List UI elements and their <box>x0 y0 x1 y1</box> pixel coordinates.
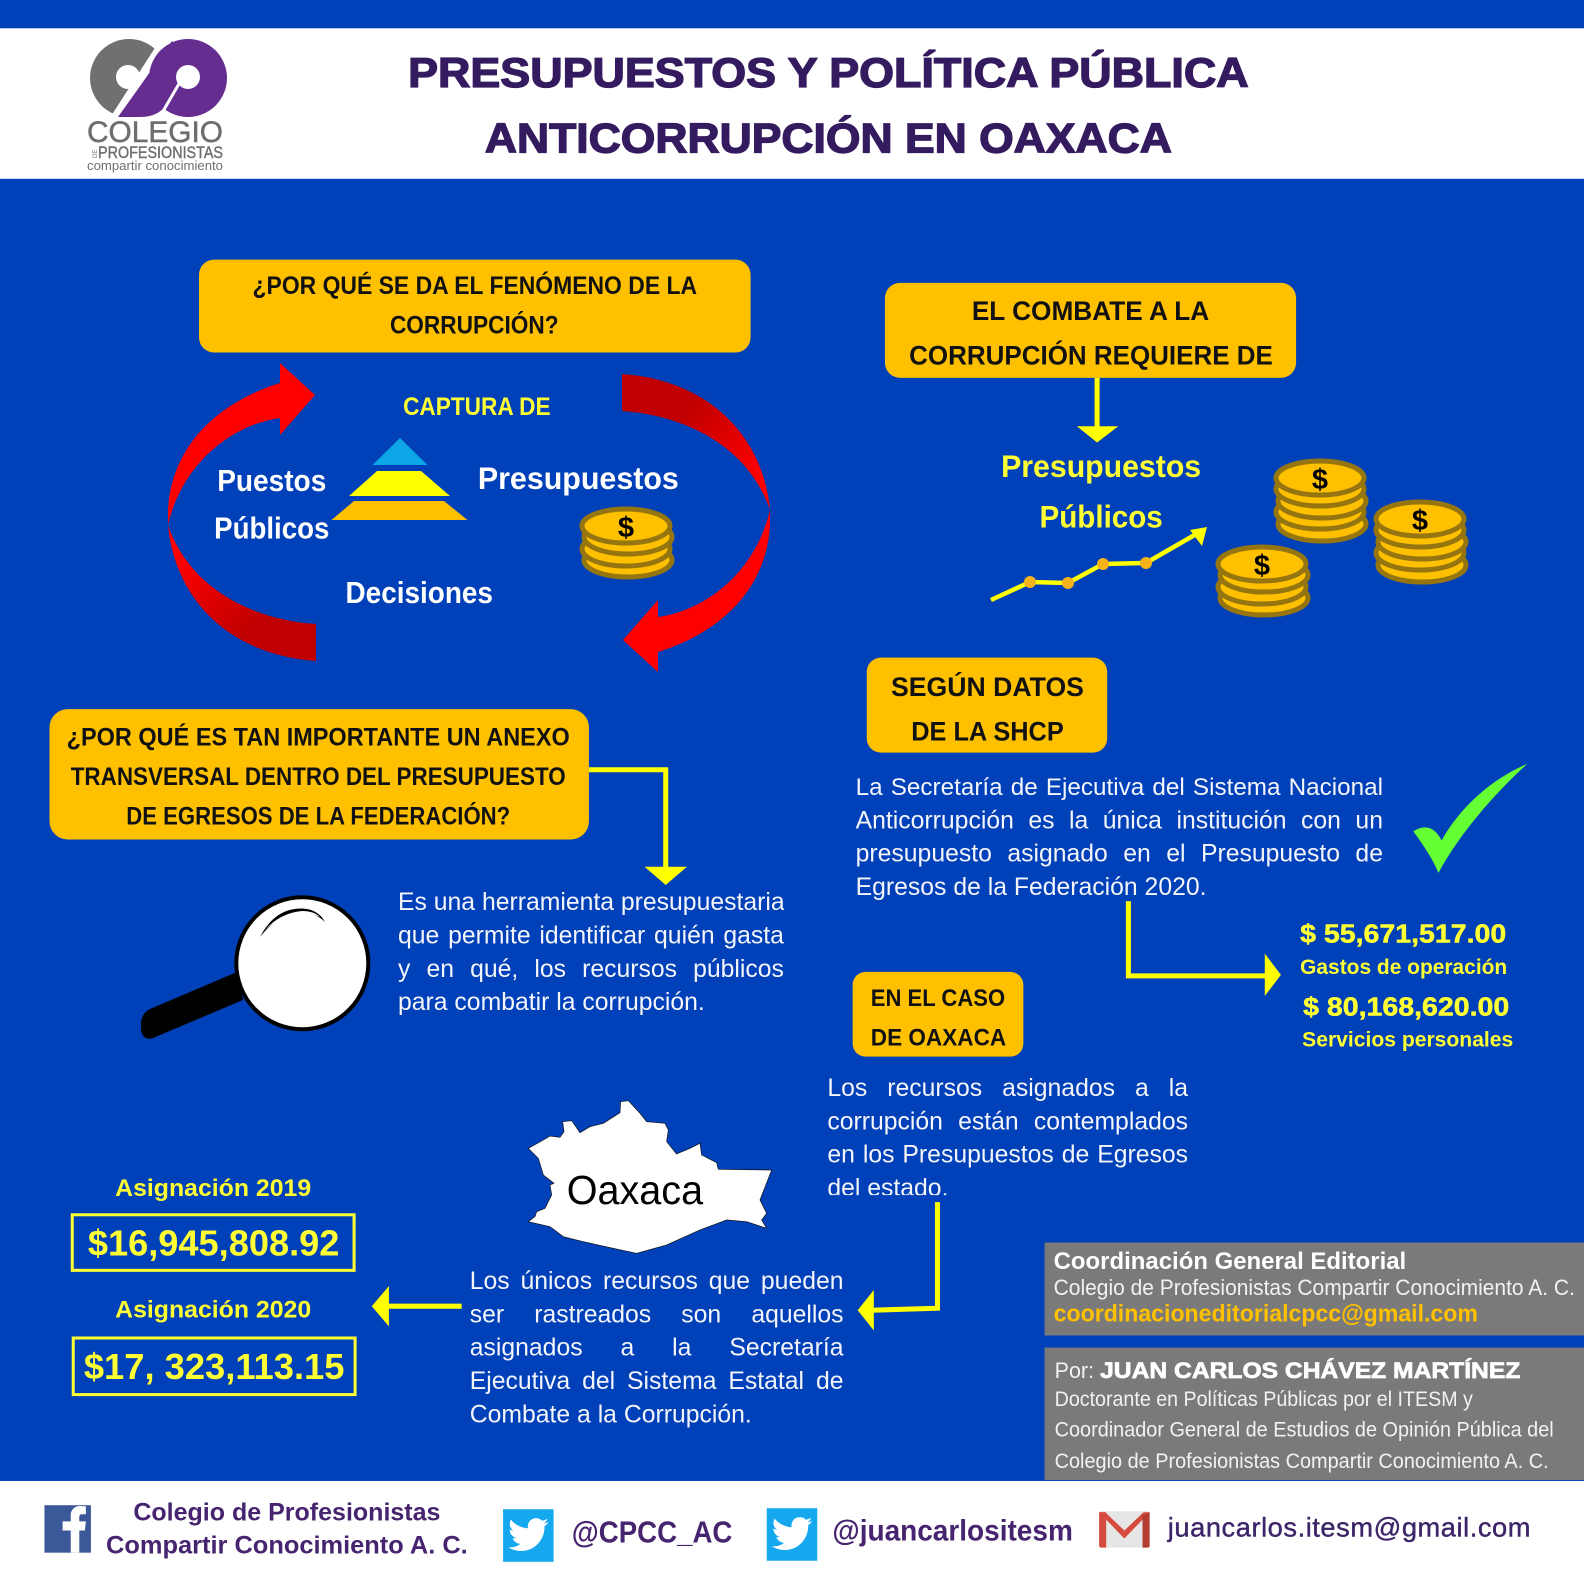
panel: coordinación editorial: Coordinación General Editorial <box>1054 1248 1406 1275</box>
icon: three coin stacks <box>1218 461 1466 615</box>
arrow down <box>1077 378 1118 442</box>
logo: Colegio de Profesionistas: DE <box>93 150 99 158</box>
text: facebook page: Colegio de Profesionistas <box>133 1498 440 1526</box>
icon: three coin stacks: $ <box>1254 550 1270 582</box>
text: únicos recursos rastreados: Los únicos recursos que pueden <box>470 1268 844 1295</box>
callout: anexo transversal: TRANSVERSAL DENTRO DEL PRESUPUESTO <box>71 763 566 791</box>
text: únicos recursos rastreados: asignados a la Secretaría <box>470 1334 844 1362</box>
map: Oaxaca: Oaxaca <box>567 1167 704 1213</box>
callout: por qué se da el fenómeno: ¿POR QUÉ SE DA EL FENÓMENO DE LA <box>253 270 697 300</box>
callout: según datos de la SHCP: DE LA SHCP <box>911 715 1064 746</box>
label: captura de: CAPTURA DE <box>403 393 551 421</box>
label: puestos públicos <box>214 465 329 545</box>
callout: el combate a la corrupción <box>885 283 1296 378</box>
callout: por qué se da el fenómeno: CORRUPCIÓN? <box>390 309 559 339</box>
text: twitter CPCC: @CPCC_AC <box>572 1517 733 1550</box>
icon: coin stack: $ <box>618 512 634 544</box>
callout: anexo transversal <box>50 709 589 839</box>
callout: el combate a la corrupción: CORRUPCIÓN REQUIERE DE <box>909 340 1273 371</box>
label: puestos públicos: Puestos <box>217 465 326 498</box>
text: recursos asignados: corrupción están contemplados <box>827 1108 1188 1135</box>
callout: según datos de la SHCP: SEGÚN DATOS <box>891 671 1084 702</box>
callout: el combate a la corrupción: EL COMBATE A LA <box>972 295 1209 326</box>
icon: three coin stacks: $ <box>1412 505 1428 537</box>
panel: coordinación editorial <box>1045 1243 1584 1335</box>
label: presupuestos públicos: Presupuestos <box>1001 449 1201 484</box>
connector arrow to text <box>858 1202 937 1330</box>
text: secretaría ejecutiva <box>856 772 1383 908</box>
text: facebook page: Compartir Conocimiento A. C. <box>106 1532 468 1560</box>
title: ANTICORRUPCIÓN EN OAXACA <box>485 116 1172 162</box>
allocation 2019: $16,945,808.92 <box>88 1223 339 1264</box>
text: herramienta presupuestaria: que permite identificar quién gasta <box>398 922 784 949</box>
amounts: SHCP budget: $ 55,671,517.00 <box>1300 919 1506 949</box>
footer band <box>0 1481 1584 1584</box>
text: recursos asignados: Los recursos asignados a la <box>827 1075 1188 1102</box>
chart: rising line <box>991 527 1207 600</box>
icon: three coin stacks: $ <box>1312 464 1328 496</box>
text: únicos recursos rastreados: Combate a la Corrupción. <box>470 1401 752 1428</box>
amounts: SHCP budget: $ 80,168,620.00 <box>1303 991 1509 1021</box>
icon: magnifying glass <box>141 897 368 1039</box>
amounts: SHCP budget: Gastos de operación <box>1300 956 1507 979</box>
callout: en el caso de Oaxaca <box>853 972 1023 1057</box>
text: herramienta presupuestaria: para combatir la corrupción. <box>398 989 705 1016</box>
icon: green check mark <box>1413 764 1527 873</box>
map: Oaxaca <box>528 1101 772 1253</box>
text: secretaría ejecutiva: La Secretaría de Ejecutiva del Sistema Nacional <box>856 774 1383 801</box>
text: secretaría ejecutiva: Anticorrupción es la única institución con un <box>856 807 1383 834</box>
allocation 2020: Asignación 2020 <box>115 1296 311 1323</box>
icon: coin stack <box>582 509 672 577</box>
label: presupuestos: Presupuestos <box>478 461 679 496</box>
allocation 2019 <box>72 1175 354 1270</box>
text: únicos recursos rastreados: Ejecutiva del Sistema Estatal de <box>470 1367 844 1395</box>
panel: autor <box>1045 1348 1584 1480</box>
cycle arrows <box>168 363 770 672</box>
panel: autor: Doctorante en Políticas Públicas por el ITESM y <box>1055 1388 1473 1411</box>
callout: según datos de la SHCP <box>867 658 1107 753</box>
panel: autor: Colegio de Profesionistas Compartir Conocimiento A. C. <box>1055 1450 1549 1473</box>
icon: facebook <box>44 1505 91 1553</box>
arrow to allocations <box>372 1286 462 1326</box>
label: presupuestos públicos <box>1001 449 1201 534</box>
text: facebook page <box>106 1498 468 1560</box>
logo: Colegio de Profesionistas <box>87 39 227 173</box>
logo: Colegio de Profesionistas: compartir conocimiento <box>87 158 223 173</box>
callout: anexo transversal: ¿POR QUÉ ES TAN IMPORTANTE UN ANEXO <box>67 723 570 752</box>
amounts: SHCP budget <box>1300 919 1513 1052</box>
amounts: SHCP budget: Servicios personales <box>1302 1029 1513 1052</box>
panel: autor: Coordinador General de Estudios de Opinión Pública del <box>1055 1419 1554 1442</box>
text: recursos asignados <box>827 1073 1188 1195</box>
header band <box>0 28 1584 179</box>
text: herramienta presupuestaria <box>398 887 784 1023</box>
panel: autor: Por: <box>1055 1358 1094 1383</box>
text: herramienta presupuestaria: Es una herramienta presupuestaria <box>398 889 784 916</box>
text: únicos recursos rastreados <box>470 1266 844 1436</box>
logo: Colegio de Profesionistas: COLEGIO <box>87 116 223 149</box>
connector arrow to amounts <box>1128 901 1281 996</box>
connector arrow <box>589 770 687 885</box>
title <box>408 50 1249 162</box>
allocation 2020 <box>73 1296 355 1395</box>
label: puestos públicos: Públicos <box>214 512 329 545</box>
panel: coordinación editorial: coordinacioneditorialcpcc@gmail.com <box>1054 1300 1478 1327</box>
icon: gmail <box>1099 1511 1150 1548</box>
title: PRESUPUESTOS Y POLÍTICA PÚBLICA <box>408 50 1249 96</box>
allocation 2019: Asignación 2019 <box>115 1175 311 1202</box>
text: únicos recursos rastreados: ser rastreados son aquellos <box>470 1301 844 1328</box>
panel: autor: JUAN CARLOS CHÁVEZ MARTÍNEZ <box>1100 1358 1520 1383</box>
text: twitter juan carlos: @juancarlositesm <box>832 1515 1073 1548</box>
callout: anexo transversal: DE EGRESOS DE LA FEDERACIÓN? <box>126 800 510 830</box>
callout: en el caso de Oaxaca: EN EL CASO <box>871 985 1005 1012</box>
text: secretaría ejecutiva: presupuesto asignado en el Presupuesto de <box>856 840 1383 868</box>
icon: twitter <box>503 1509 554 1562</box>
icon: twitter <box>767 1508 817 1561</box>
text: email: juancarlos.itesm@gmail.com <box>1167 1512 1530 1543</box>
icon: pyramid <box>332 438 468 520</box>
text: herramienta presupuestaria: y en qué, los recursos públicos <box>398 955 784 983</box>
callout: por qué se da el fenómeno <box>199 260 751 353</box>
logo: Colegio de Profesionistas: PROFESIONISTAS <box>98 143 223 162</box>
label: presupuestos públicos: Públicos <box>1040 499 1163 534</box>
text: recursos asignados: en los Presupuestos de Egresos <box>827 1141 1188 1169</box>
allocation 2020: $17, 323,113.15 <box>84 1346 344 1387</box>
label: decisiones: Decisiones <box>345 577 493 610</box>
text: secretaría ejecutiva: Egresos de la Federación 2020. <box>856 873 1206 901</box>
callout: en el caso de Oaxaca: DE OAXACA <box>871 1025 1006 1052</box>
